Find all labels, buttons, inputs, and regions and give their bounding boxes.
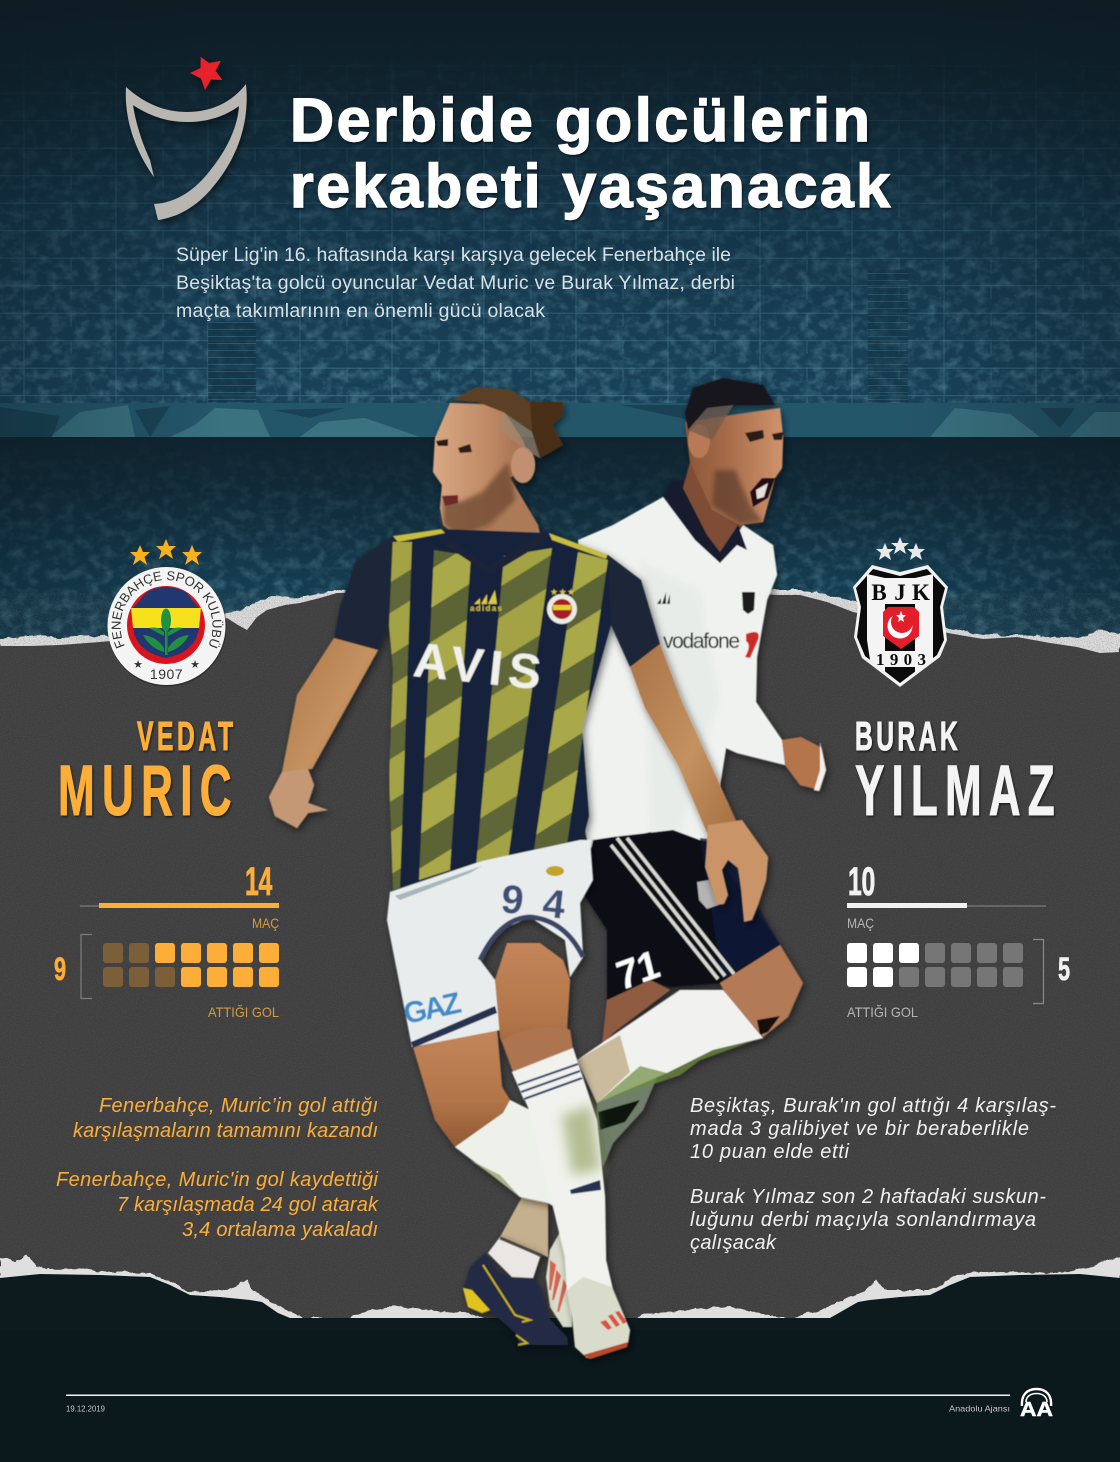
icon: black boot (463, 1253, 568, 1345)
crest letters: K (912, 580, 930, 605)
shin and lower sock (596, 1077, 657, 1167)
notes: Muric (56, 1095, 379, 1241)
crest letters (871, 580, 930, 669)
Fenerbahce crest: ★ (190, 659, 200, 671)
jersey badge (742, 592, 755, 614)
jersey badge: ★★★ (550, 587, 576, 597)
collar (663, 480, 747, 563)
bracket (81, 934, 92, 998)
shorts sponsor: GAZ (401, 987, 464, 1031)
icon: red star (190, 57, 222, 90)
crest letters: B (871, 580, 887, 605)
dark footer field (0, 1274, 1120, 1462)
eyes and mouth (436, 439, 472, 453)
matches number: 14 (245, 860, 273, 905)
shorts number: 71 (612, 942, 664, 1000)
torn white paper edge, bottom (0, 1255, 1120, 1340)
name: Vedat Muric (58, 714, 233, 831)
matches label: MAÇ (847, 915, 874, 931)
panel: torn grey paper (0, 585, 1120, 1462)
sponsor: AVIS (411, 633, 544, 700)
sock brand (570, 1180, 601, 1194)
adidas mark: adidas (470, 604, 503, 613)
right sock (512, 1048, 613, 1290)
stairway right (868, 270, 908, 402)
player: Vedat Muric (269, 387, 768, 1359)
re-draw sock top (512, 1048, 582, 1100)
near thigh (602, 980, 670, 1045)
title: Derbide golcülerin (290, 86, 870, 154)
matches bar (80, 903, 279, 908)
shorts number: 94 (499, 877, 568, 928)
ear (688, 424, 710, 458)
goals label: ATTIĞI GOL (847, 1004, 918, 1020)
eyes (745, 430, 764, 442)
player: Burak Yilmaz (500, 378, 826, 1327)
footer rule (66, 1394, 1010, 1396)
leaf emblem (143, 608, 189, 655)
goals label: ATTIĞI GOL (208, 1004, 279, 1020)
notes: Muric: Fenerbahçe, Muric’in gol attığı (99, 1095, 378, 1117)
name: Burak Yilmaz (855, 714, 1055, 831)
neck (683, 462, 763, 552)
beard (443, 462, 515, 538)
title (290, 86, 890, 220)
stats: Yilmaz (847, 860, 1070, 1020)
shorts crest (546, 866, 564, 876)
icon: league shield (126, 84, 247, 220)
notes: Yilmaz (690, 1095, 1056, 1254)
red stripe boot (546, 1232, 572, 1327)
collar (445, 530, 548, 575)
notes: Yilmaz: luğunu derbi maçıyla sonlandırmaya (690, 1209, 1036, 1231)
sponsor text: vodafone (663, 630, 740, 653)
background: stadium stands (0, 0, 1120, 662)
shorts stripes (611, 838, 734, 979)
notes: Muric: Fenerbahçe, Muric'in gol kaydettiği (56, 1169, 379, 1191)
thigh (720, 945, 803, 1037)
footer (66, 1389, 1053, 1421)
jersey sleeves (334, 536, 410, 650)
shorts (583, 830, 780, 1000)
right arm (630, 644, 750, 867)
goals count: 9 (54, 951, 66, 987)
hair (685, 378, 775, 430)
Fenerbahce crest (108, 539, 226, 686)
agency name: Anadolu Ajansı (949, 1404, 1010, 1414)
right hand (705, 820, 768, 922)
torn white paper edge, top (0, 585, 1120, 680)
notes: Muric: 7 karşılaşmada 24 gol atarak (117, 1194, 379, 1216)
mouth (750, 478, 775, 507)
intro text: Süper Lig'in 16. haftasında karşı karşıya gelecek Fenerbahçe ile (176, 244, 731, 266)
shorts crest (697, 880, 718, 909)
jersey stripes (388, 529, 608, 890)
icon: AA logo (1020, 1389, 1053, 1421)
dark lower crowd (0, 437, 1120, 662)
jersey (569, 497, 785, 848)
ear (511, 447, 535, 483)
goal squares (847, 943, 1023, 987)
notes: Muric: karşılaşmaların tamamını kazandı (73, 1120, 378, 1142)
name: Vedat Muric: VEDAT (137, 714, 233, 760)
notes: Yilmaz: Beşiktaş, Burak'ın gol attığı 4 karşılaş- (690, 1095, 1056, 1117)
red shield (883, 607, 919, 649)
arm cuff and hand (782, 737, 826, 790)
left arm (269, 638, 378, 828)
bracket (1033, 940, 1044, 1004)
icon: three gold stars (130, 539, 202, 565)
jersey badge (547, 587, 577, 624)
crest lettering: FENERBAHÇE SPOR KULÜBÜ (112, 571, 224, 648)
head (685, 408, 783, 525)
left sock (455, 1100, 560, 1210)
adidas mark (470, 590, 503, 613)
league logo (126, 57, 247, 220)
matches number: 10 (848, 860, 875, 905)
stats: Muric (54, 860, 279, 1020)
grey panel surface (0, 590, 1120, 1330)
intro text (176, 244, 735, 322)
notes: Yilmaz: 10 puan elde etti (690, 1141, 850, 1163)
name: Burak Yilmaz: YILMAZ (855, 751, 1055, 831)
white stripes (867, 574, 933, 672)
notes: Yilmaz: mada 3 galibiyet ve bir beraberlikle (690, 1118, 1029, 1140)
intro text: Beşiktaş'ta golcü oyuncular Vedat Muric ve Burak Yılmaz, derbi (176, 272, 735, 294)
hair (452, 387, 563, 458)
crest letters: 1903 (876, 650, 926, 669)
icon: AA logo: AA (1020, 1399, 1053, 1421)
notes: Muric: 3,4 ortalama yakaladı (182, 1219, 378, 1241)
title: rekabeti yaşanacak (290, 152, 890, 220)
head (433, 403, 532, 538)
ankle white (488, 1237, 540, 1278)
ankle tape (500, 1197, 548, 1257)
shorts (387, 840, 593, 1047)
stairway left (208, 322, 256, 402)
icon: white boot (567, 1277, 630, 1359)
intro text: maçta takımlarının en önemli gücü olacak (176, 300, 545, 322)
adidas mark (657, 592, 670, 604)
crest letters: J (894, 580, 906, 605)
Besiktas crest (853, 537, 948, 687)
right thigh (495, 943, 573, 1072)
notes: Yilmaz: çalışacak (690, 1232, 777, 1254)
left thigh (413, 1030, 510, 1147)
Fenerbahce crest: ★ (133, 659, 143, 671)
jersey body (389, 529, 611, 890)
sock (577, 990, 763, 1103)
matches label: MAÇ (252, 915, 279, 931)
name: Burak Yilmaz: BURAK (855, 714, 958, 760)
goals count: 5 (1058, 951, 1070, 987)
icon: three white stars (876, 537, 925, 560)
banner strip (0, 403, 1120, 437)
goal squares (103, 943, 279, 987)
notes: Yilmaz: Burak Yılmaz son 2 haftadaki suskun- (690, 1186, 1046, 1208)
name: Vedat Muric: MURIC (58, 751, 232, 831)
Fenerbahce crest: 1907 (150, 666, 183, 682)
neck (453, 478, 540, 567)
date: 19.12.2019 (66, 1404, 105, 1414)
matches bar (847, 903, 1046, 908)
